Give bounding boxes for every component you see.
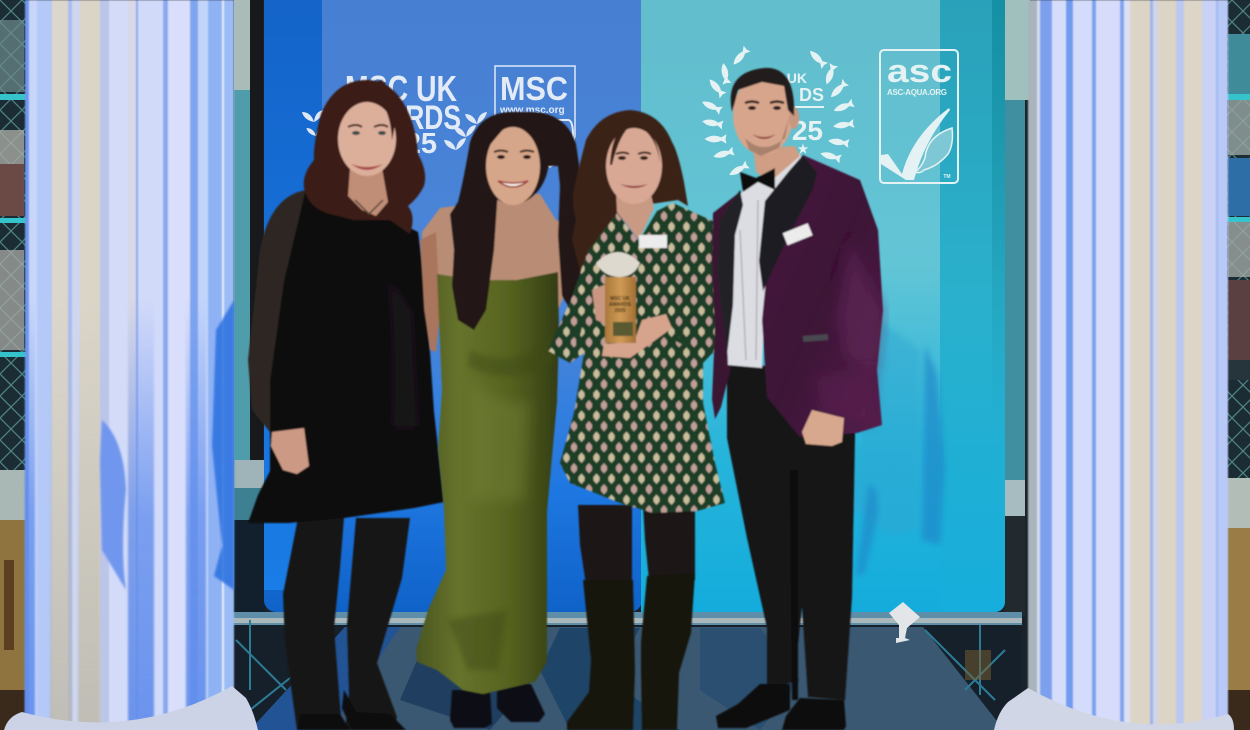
shoulders and chest bbox=[422, 194, 568, 310]
hair: long dark bbox=[450, 112, 592, 330]
logo: MSC UK Awards 2025: MSC UK bbox=[345, 68, 457, 109]
name badge bbox=[639, 235, 667, 248]
backdrop: ASC teal panel bbox=[641, 0, 1005, 612]
trousers: black bbox=[727, 360, 855, 700]
person: man in burgundy velvet jacket bbox=[712, 68, 883, 730]
legs: black tights bbox=[578, 505, 695, 585]
necklace bbox=[355, 200, 383, 214]
base: left column plinth bbox=[4, 686, 258, 730]
award: shell trophy: MSC UK bbox=[610, 296, 630, 302]
logo: fish laurel with awards text: DS bbox=[799, 85, 824, 105]
hand: left behind trophy bbox=[592, 284, 606, 324]
dress: patterned wrap bbox=[548, 203, 725, 513]
pillar: right fluted column bbox=[994, 0, 1234, 730]
hand: right holding base bbox=[602, 314, 672, 358]
pocket bbox=[803, 334, 828, 342]
shadows: cast on backdrop bbox=[850, 320, 945, 575]
hand: left bbox=[271, 428, 309, 474]
shadow: right edge saturated bbox=[212, 300, 234, 590]
window frame: left of backdrop bbox=[234, 0, 266, 615]
arm: left bbox=[420, 232, 440, 352]
award: shell trophy: AWARDS bbox=[609, 302, 632, 308]
hair: brown waves bbox=[304, 80, 425, 234]
window frame: right of backdrop bbox=[1005, 0, 1030, 616]
stage: carpet bbox=[250, 627, 1004, 730]
neck bbox=[753, 146, 800, 182]
logo: fish laurel with awards text: ★ bbox=[798, 142, 809, 156]
dress: black velvet bbox=[248, 188, 444, 523]
person: woman in black velvet dress bbox=[248, 80, 444, 730]
logo: MSC UK Awards 2025: 2025 bbox=[372, 128, 437, 160]
badge: name tag bbox=[783, 223, 813, 245]
person: woman in olive satin dress bbox=[416, 112, 592, 728]
dress: olive satin bbox=[416, 272, 559, 694]
face bbox=[338, 102, 396, 176]
shoes: heels bbox=[298, 690, 406, 730]
logo: MSC UK Awards 2025: AWARDS bbox=[345, 99, 461, 137]
backdrop: MSC blue panel bbox=[264, 0, 642, 612]
logo: ASC ecolabel bbox=[880, 50, 958, 183]
bow tie bbox=[740, 168, 775, 192]
award: shell trophy bbox=[596, 252, 640, 343]
shoes: black flats bbox=[450, 684, 545, 728]
logo: ASC ecolabel: TM bbox=[943, 174, 951, 180]
sleeve: sheer left bbox=[248, 190, 312, 432]
logo: fish laurel with awards text bbox=[700, 46, 855, 179]
hand: right bbox=[802, 410, 844, 446]
neck bbox=[616, 190, 654, 240]
award: shell trophy: 2025 bbox=[614, 308, 626, 314]
lamp: stage spotlight bbox=[889, 602, 920, 643]
logo: MSC ecolabel bbox=[495, 66, 575, 167]
chest: neckline bbox=[348, 168, 388, 216]
jacket: left panel bbox=[712, 191, 741, 419]
base: right column plinth bbox=[994, 688, 1234, 730]
logo: MSC ecolabel: www.msc.org bbox=[499, 105, 565, 116]
face bbox=[733, 75, 793, 155]
shoes: black leather bbox=[716, 684, 846, 730]
boots: black suede bbox=[567, 573, 695, 730]
lapel: black satin bbox=[759, 155, 817, 291]
logo: MSC UK Awards 2025 bbox=[302, 68, 487, 160]
jacket: burgundy velvet bbox=[762, 155, 883, 437]
legs: black tights bbox=[283, 518, 410, 730]
logo: ASC ecolabel: ASC-AQUA.ORG bbox=[887, 88, 947, 97]
logo: fish laurel with awards text: 25 bbox=[792, 115, 823, 146]
shirt: white bbox=[722, 153, 808, 368]
face bbox=[486, 127, 540, 205]
person: woman in patterned dress bbox=[548, 110, 725, 730]
shading: lower blue light bbox=[25, 300, 206, 730]
shadow: figure cast on column bbox=[100, 420, 126, 590]
bookshelf: left bbox=[0, 0, 26, 730]
stage: truss and floor bbox=[232, 602, 1022, 730]
hair: curly brown bbox=[572, 110, 688, 284]
logo: fish laurel with awards text: UK bbox=[787, 70, 807, 86]
bookshelf: right bbox=[1226, 0, 1250, 730]
face bbox=[606, 128, 662, 204]
logo: MSC ecolabel: MSC bbox=[500, 70, 568, 107]
stage: truss struts bbox=[236, 620, 1005, 710]
logo: ASC ecolabel: asc bbox=[887, 53, 952, 89]
pillar: left fluted column bbox=[4, 0, 258, 730]
